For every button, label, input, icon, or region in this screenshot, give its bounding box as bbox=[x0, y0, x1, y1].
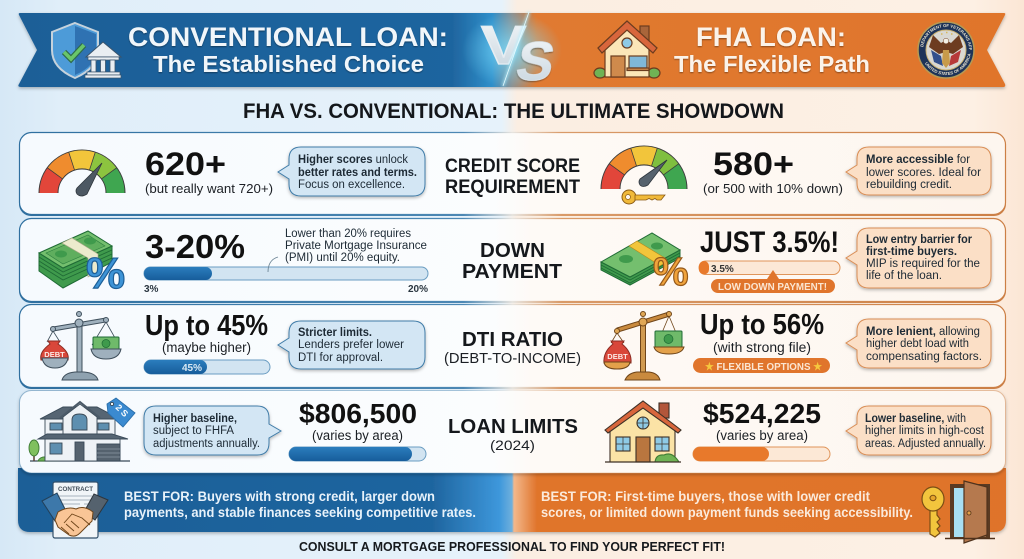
icon: contract and handshake bbox=[42, 482, 108, 538]
callout: low entry barrier: Low entry barrier for bbox=[866, 234, 972, 246]
callout: low entry barrier: life of the loan. bbox=[866, 270, 942, 282]
icon: key and open door bbox=[922, 481, 995, 543]
label: dti ratio: (DEBT-TO-INCOME) bbox=[444, 351, 581, 367]
callout: more lenient: More lenient, allowing bbox=[866, 326, 980, 338]
callout: low entry barrier: first-time buyers. bbox=[866, 246, 957, 258]
progress bar: 45 percent bbox=[144, 360, 270, 374]
icon: conventional scale bbox=[41, 312, 121, 380]
credit value: conventional bbox=[145, 146, 273, 196]
heading: fha loan bbox=[674, 22, 870, 77]
callout: higher baseline bbox=[144, 406, 281, 455]
callout: higher scores: Focus on excellence. bbox=[298, 179, 405, 191]
callout: higher scores: Higher scores unlock bbox=[298, 154, 408, 166]
badge: flexible options: ★ FLEXIBLE OPTIONS ★ bbox=[705, 361, 823, 373]
label: down payment: DOWN bbox=[480, 239, 545, 262]
credit value: fha: (or 500 with 10% down) bbox=[703, 181, 843, 196]
callout: lower baseline: higher limits in high-cost bbox=[865, 425, 985, 437]
down payment value: conventional: 3-20% bbox=[145, 228, 245, 265]
callout: more lenient: compensating factors. bbox=[866, 351, 982, 363]
icon: conventional scale: DEBT bbox=[44, 350, 65, 359]
text: best for fha: BEST FOR: First-time buyers, those with lower credit bbox=[541, 489, 870, 504]
credit value: conventional: 620+ bbox=[145, 146, 226, 182]
label: credit score requirement: REQUIREMENT bbox=[445, 176, 580, 198]
label: down payment bbox=[462, 239, 562, 283]
credit value: fha: 580+ bbox=[713, 146, 794, 182]
text: best for conventional: payments, and stable finances seeking competitive rates. bbox=[124, 505, 476, 520]
text: best for conventional: BEST FOR: Buyers with strong credit, larger down bbox=[124, 489, 435, 504]
progress bar: 3.5 percent bbox=[699, 261, 840, 279]
callout: more accessible: More accessible for bbox=[866, 154, 970, 166]
callout: higher baseline: Higher baseline, bbox=[153, 413, 237, 425]
callout: lower baseline: Lower baseline, with bbox=[865, 413, 966, 425]
callout: higher baseline: subject to FHFA bbox=[153, 425, 234, 437]
icon: fha scale: DEBT bbox=[607, 352, 628, 361]
dti value: fha bbox=[700, 309, 824, 355]
loan value: conventional bbox=[299, 398, 417, 443]
callout: stricter limits: DTI for approval. bbox=[298, 352, 383, 364]
callout: stricter limits: Lenders prefer lower bbox=[298, 339, 404, 351]
credit value: fha bbox=[703, 146, 843, 196]
icon: conventional house with price tag: 2 S bbox=[114, 402, 130, 419]
heading: conventional loan: The Established Choice bbox=[153, 51, 424, 77]
loan value: fha bbox=[703, 398, 821, 443]
heading: conventional loan: CONVENTIONAL LOAN: bbox=[128, 22, 448, 52]
label: dti ratio bbox=[444, 328, 581, 367]
icon: conventional house with price tag bbox=[29, 398, 135, 461]
progress bar: 3 to 20 percent bbox=[144, 257, 428, 295]
callout: higher scores: better rates and terms. bbox=[298, 167, 417, 179]
callout: more accessible bbox=[846, 147, 991, 195]
heading: conventional loan bbox=[128, 22, 448, 77]
label: credit score requirement: CREDIT SCORE bbox=[445, 155, 580, 177]
badge: low down payment: LOW DOWN PAYMENT! bbox=[718, 282, 827, 293]
label: loan limits bbox=[448, 415, 578, 453]
footer call to action: CONSULT A MORTGAGE PROFESSIONAL TO FIND YOUR PERFECT FIT! bbox=[299, 540, 725, 554]
note: pmi: Private Mortgage Insurance bbox=[285, 240, 427, 252]
callout: higher baseline: adjustments annually. bbox=[153, 438, 260, 450]
dti value: conventional: (maybe higher) bbox=[162, 340, 251, 355]
title: FHA VS. CONVENTIONAL: THE ULTIMATE SHOWDOWN bbox=[243, 100, 784, 123]
callout: higher scores bbox=[278, 147, 425, 196]
VS badge: S bbox=[512, 30, 559, 92]
heading: fha loan: The Flexible Path bbox=[674, 51, 870, 77]
panel: best for conventional and fha band bbox=[18, 468, 1006, 532]
label: loan limits: (2024) bbox=[490, 438, 535, 453]
icon: fha gauge with key bbox=[609, 148, 679, 204]
text: best for fha: scores, or limited down payment funds seeking accessibility. bbox=[541, 505, 913, 520]
credit value: conventional: (but really want 720+) bbox=[145, 181, 273, 196]
badge: flexible options bbox=[693, 358, 830, 373]
callout: stricter limits: Stricter limits. bbox=[298, 327, 372, 339]
icon: conventional money and percent: % bbox=[86, 249, 125, 298]
dti value: fha: (with strong file) bbox=[713, 340, 811, 355]
note: pmi: (PMI) until 20% equity. bbox=[285, 252, 400, 264]
icon: department seal bbox=[917, 21, 975, 79]
callout: more accessible: lower scores. Ideal for bbox=[866, 167, 981, 179]
progress bar: 45 percent: 45% bbox=[182, 363, 202, 374]
dti value: fha: Up to 56% bbox=[700, 309, 824, 341]
VS badge: V bbox=[481, 15, 526, 76]
note: pmi bbox=[285, 228, 427, 264]
callout: low entry barrier bbox=[846, 228, 991, 288]
progress bar: fha limit bbox=[693, 447, 830, 461]
heading: fha loan: FHA LOAN: bbox=[696, 22, 846, 52]
icon: department seal: UNITED STATES OF AMERICA bbox=[925, 54, 971, 76]
callout: stricter limits bbox=[278, 321, 425, 369]
icon: fha money and percent: % bbox=[653, 250, 689, 294]
label: down payment: PAYMENT bbox=[462, 260, 562, 283]
panel: loan limits bbox=[20, 390, 1006, 473]
label: credit score requirement bbox=[445, 155, 580, 198]
text: best for fha bbox=[541, 489, 913, 520]
icon: conventional money and percent bbox=[39, 231, 125, 298]
callout: low entry barrier: MIP is required for the bbox=[866, 258, 980, 270]
callout: more lenient: higher debt load with bbox=[866, 338, 969, 350]
note: pmi: Lower than 20% requires bbox=[285, 228, 411, 240]
dti value: conventional: Up to 45% bbox=[145, 310, 268, 342]
progress bar: conventional limit bbox=[289, 447, 426, 461]
label: loan limits: LOAN LIMITS bbox=[448, 415, 578, 438]
callout: more lenient bbox=[846, 319, 991, 368]
callout: lower baseline bbox=[846, 406, 991, 455]
icon: contract and handshake: CONTRACT bbox=[58, 486, 93, 493]
icon: fha scale bbox=[604, 312, 684, 380]
progress bar: 3 to 20 percent: 3% bbox=[144, 284, 159, 295]
loan value: conventional: $806,500 bbox=[299, 398, 417, 429]
loan value: conventional: (varies by area) bbox=[312, 428, 403, 443]
panel: dti ratio bbox=[19, 304, 1006, 389]
VS badge bbox=[462, 12, 562, 92]
icon: shield and bank bbox=[52, 23, 121, 78]
progress bar: 3 to 20 percent: 20% bbox=[408, 284, 428, 295]
callout: more accessible: rebuilding credit. bbox=[866, 179, 952, 191]
icon: fha house bbox=[605, 401, 681, 462]
header banner bbox=[17, 12, 1006, 90]
icon: house bbox=[594, 21, 660, 78]
icon: conventional gauge bbox=[47, 152, 117, 196]
dti value: conventional bbox=[145, 310, 268, 355]
loan value: fha: (varies by area) bbox=[716, 428, 808, 443]
icon: fha money and percent bbox=[601, 233, 689, 294]
panel: credit score bbox=[19, 132, 1006, 216]
callout: lower baseline: areas. Adjusted annually. bbox=[865, 438, 986, 450]
down payment value: fha: JUST 3.5%! bbox=[700, 226, 839, 259]
text: best for conventional bbox=[124, 489, 476, 520]
panel: down payment bbox=[19, 218, 1006, 303]
progress bar: 3.5 percent: 3.5% bbox=[711, 264, 734, 275]
loan value: fha: $524,225 bbox=[703, 398, 821, 429]
label: dti ratio: DTI RATIO bbox=[462, 328, 563, 351]
